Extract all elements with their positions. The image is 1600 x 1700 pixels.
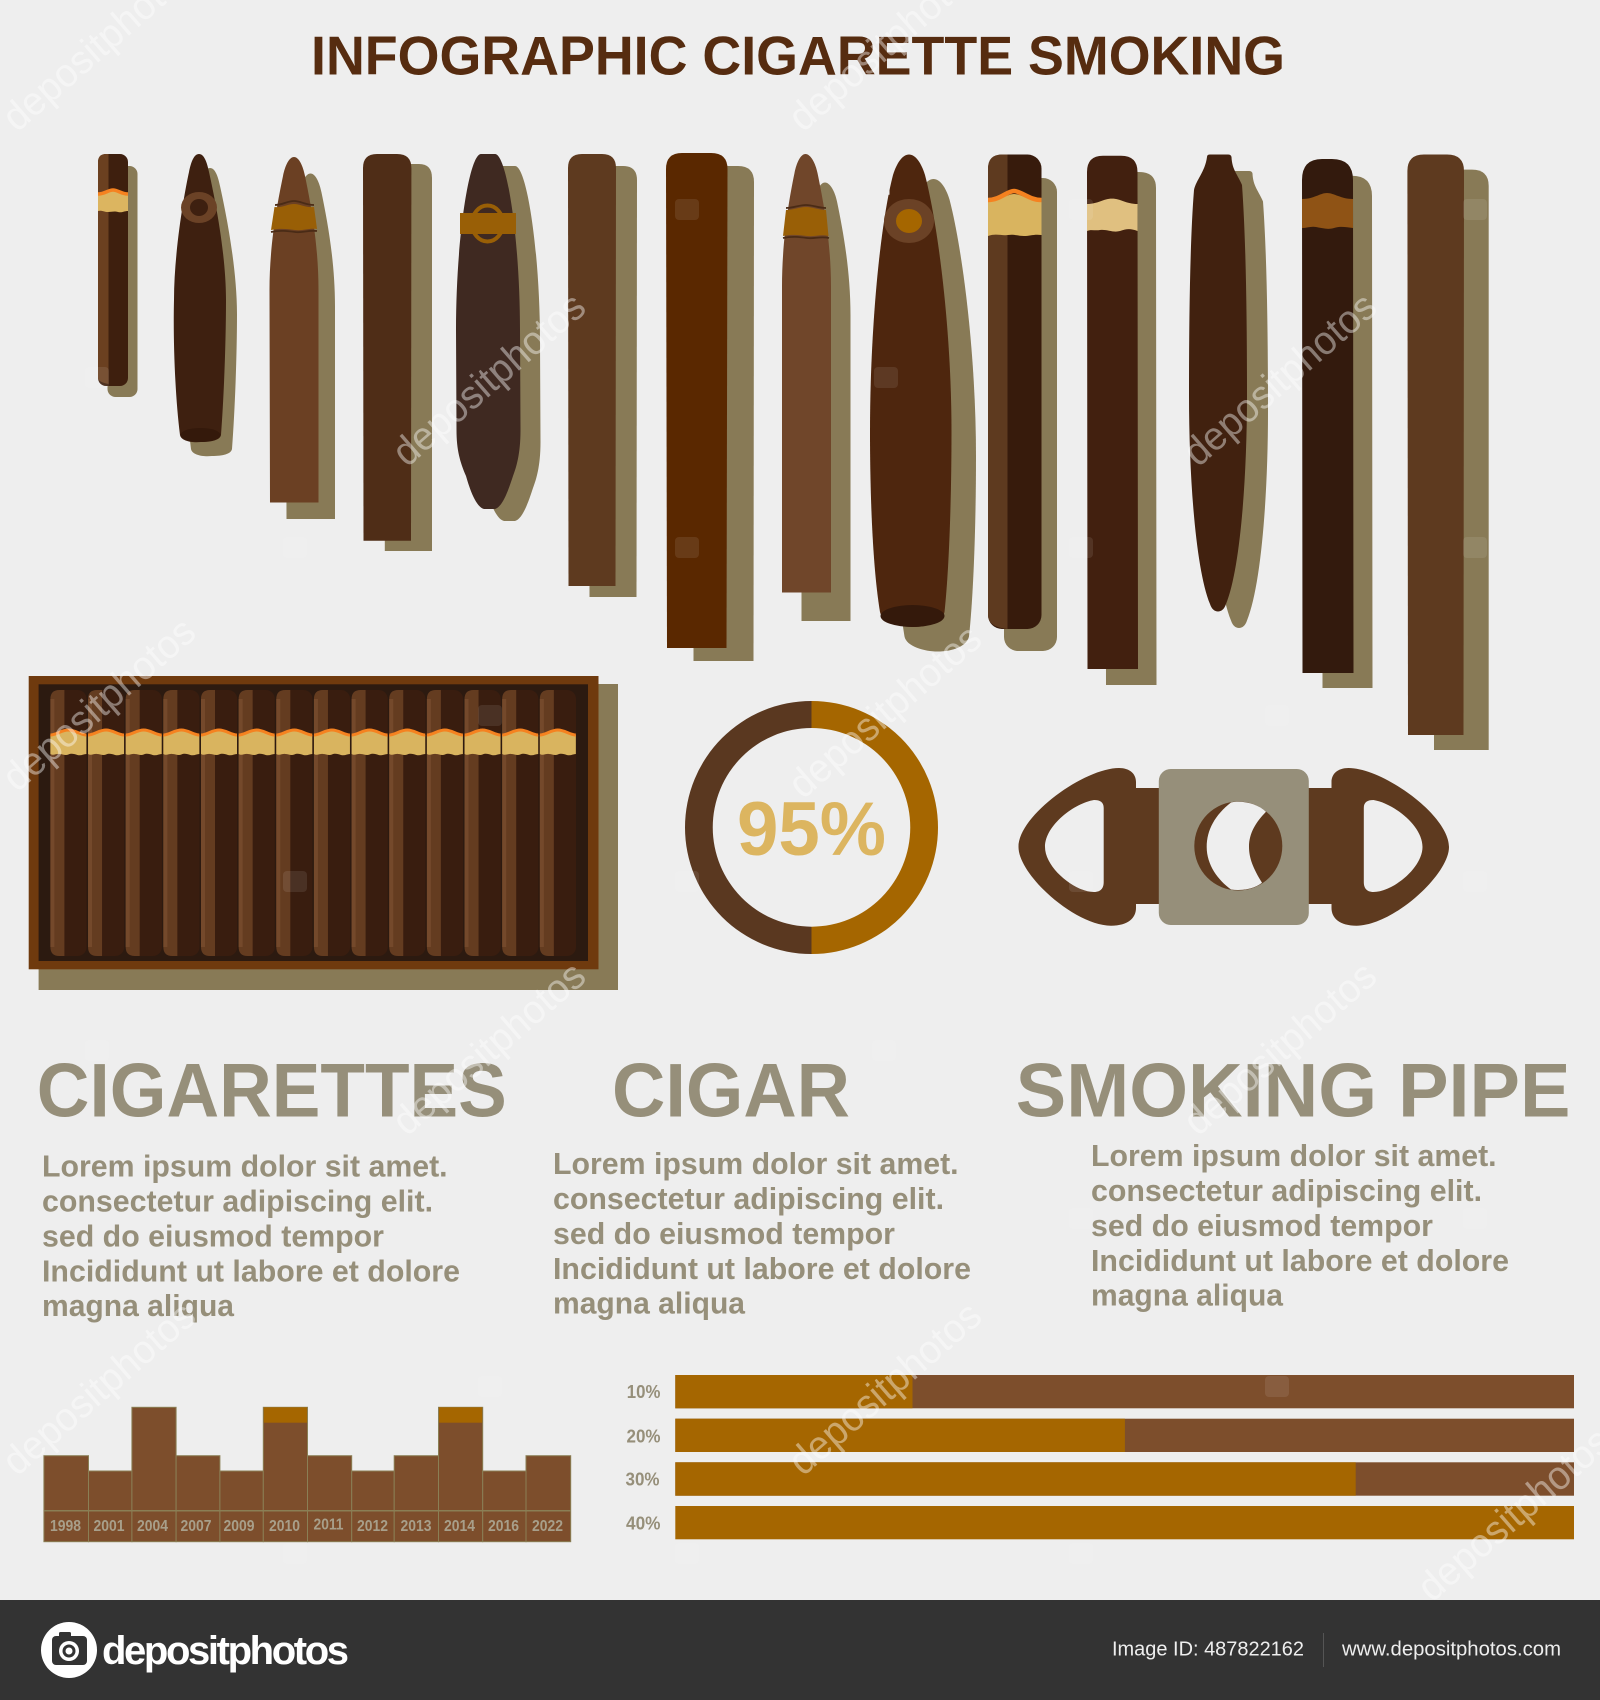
watermark overlays: depositphotos	[0, 609, 204, 800]
boxed cigar 13	[502, 690, 538, 956]
cigar 4	[363, 154, 432, 551]
text block: smoking pipe	[1091, 1138, 1509, 1313]
cigar 14	[1407, 154, 1489, 750]
boxed cigar 1	[50, 690, 87, 956]
cigar 11	[1087, 156, 1156, 685]
percentage labels	[626, 1381, 660, 1534]
heading: cigarettes: CIGARETTES	[37, 1049, 507, 1134]
cigar 8	[782, 154, 850, 621]
cigar 2	[174, 154, 237, 456]
boxed cigar 11	[427, 690, 463, 956]
cigar 9	[870, 154, 976, 652]
image id: Image ID: 487822162	[1112, 1639, 1304, 1661]
watermark overlays: depositphotos	[384, 284, 594, 475]
bar chart year labels: 2007	[180, 1518, 212, 1535]
text block: cigarettes: Lorem ipsum dolor sit amet.	[42, 1149, 448, 1184]
boxed cigar 5	[201, 690, 237, 956]
watermark camera marks	[85, 199, 1487, 1564]
text block: cigar: consectetur adipiscing elit.	[553, 1181, 944, 1216]
text block: smoking pipe: Incididunt ut labore et dolore	[1091, 1243, 1509, 1278]
cigar 5	[456, 154, 540, 521]
text block: smoking pipe: consectetur adipiscing elit.	[1091, 1173, 1482, 1208]
bar chart year labels: 2012	[357, 1518, 388, 1535]
percentage labels: 40%	[626, 1512, 660, 1534]
text block: cigar: magna aliqua	[553, 1286, 746, 1320]
cigar 3	[270, 157, 335, 519]
text block: cigar: Lorem ipsum dolor sit amet.	[553, 1146, 959, 1181]
boxed cigar 14	[540, 690, 576, 956]
bar chart year labels: 2022	[532, 1518, 563, 1535]
boxed cigar 9	[352, 690, 388, 956]
text block: cigar: Incididunt ut labore et dolore	[553, 1251, 971, 1286]
icon: cigar cutter	[1018, 768, 1449, 926]
watermark overlays: depositphotos	[384, 953, 594, 1144]
watermark overlays: depositphotos	[1175, 953, 1385, 1144]
icon: depositphotos logo	[41, 1622, 97, 1678]
text block: cigar	[553, 1146, 971, 1320]
stacked bars: percentages	[626, 1375, 1574, 1539]
heading: smoking pipe: SMOKING PIPE	[1016, 1049, 1570, 1134]
bar chart: years	[44, 1407, 571, 1542]
bar chart year labels: 2013	[400, 1518, 432, 1535]
website url: www.depositphotos.com	[1341, 1639, 1561, 1661]
text block: smoking pipe: magna aliqua	[1091, 1278, 1284, 1313]
title: INFOGRAPHIC CIGARETTE SMOKING	[311, 25, 1285, 87]
bar chart year labels: 2004	[137, 1518, 168, 1535]
heading: cigar: CIGAR	[612, 1049, 850, 1134]
text block: cigarettes: sed do eiusmod tempor	[42, 1219, 384, 1254]
watermark overlays: depositphotos	[0, 1293, 204, 1484]
watermark overlays: depositphotos	[1175, 284, 1385, 475]
text block: cigarettes: consectetur adipiscing elit.	[42, 1184, 433, 1219]
text block: smoking pipe: Lorem ipsum dolor sit amet.	[1091, 1138, 1497, 1173]
bar chart year labels: 2011	[314, 1516, 344, 1534]
text block: cigar: sed do eiusmod tempor	[553, 1216, 895, 1251]
boxed cigar 6	[239, 690, 275, 956]
percentage labels: 20%	[626, 1426, 660, 1447]
boxed cigar 10	[389, 690, 425, 956]
boxed cigar 4	[163, 690, 200, 956]
cigar 6	[568, 154, 637, 597]
panel: cigar collection	[98, 153, 1489, 750]
boxed cigar 2	[88, 690, 124, 956]
bar chart year labels: 1998	[50, 1518, 81, 1535]
bar chart year labels: 2009	[224, 1518, 255, 1535]
watermark overlays: depositphotos	[780, 616, 990, 807]
donut chart: 95%	[685, 701, 938, 954]
boxed cigar 8	[314, 690, 350, 956]
cigar 7	[666, 153, 754, 661]
boxed cigar 7	[276, 690, 312, 956]
watermark overlays: depositphotos	[780, 1293, 990, 1484]
bar chart year labels: 2001	[94, 1518, 125, 1535]
boxed cigar 3	[126, 690, 162, 956]
footer bar	[0, 1600, 1600, 1700]
boxed cigar 12	[465, 690, 501, 956]
text block: smoking pipe: sed do eiusmod tempor	[1091, 1208, 1433, 1243]
cigar 13	[1302, 159, 1372, 688]
donut value: 95%	[737, 787, 886, 872]
logo wordmark: depositphotos	[102, 1629, 349, 1673]
cigar 10	[988, 154, 1057, 651]
percentage labels: 30%	[626, 1468, 660, 1490]
bar chart year labels	[50, 1516, 563, 1535]
percentage labels: 10%	[627, 1381, 660, 1402]
text block: cigarettes	[42, 1149, 460, 1323]
bar chart year labels: 2014	[444, 1518, 475, 1535]
bar chart year labels: 2010	[269, 1518, 300, 1535]
panel: cigar box	[29, 676, 618, 990]
cigar 1	[98, 154, 138, 397]
cigar 12	[1189, 154, 1268, 628]
text block: cigarettes: magna aliqua	[42, 1288, 235, 1323]
bar chart year labels: 2016	[488, 1518, 519, 1535]
text block: cigarettes: Incididunt ut labore et dolore	[42, 1254, 460, 1289]
